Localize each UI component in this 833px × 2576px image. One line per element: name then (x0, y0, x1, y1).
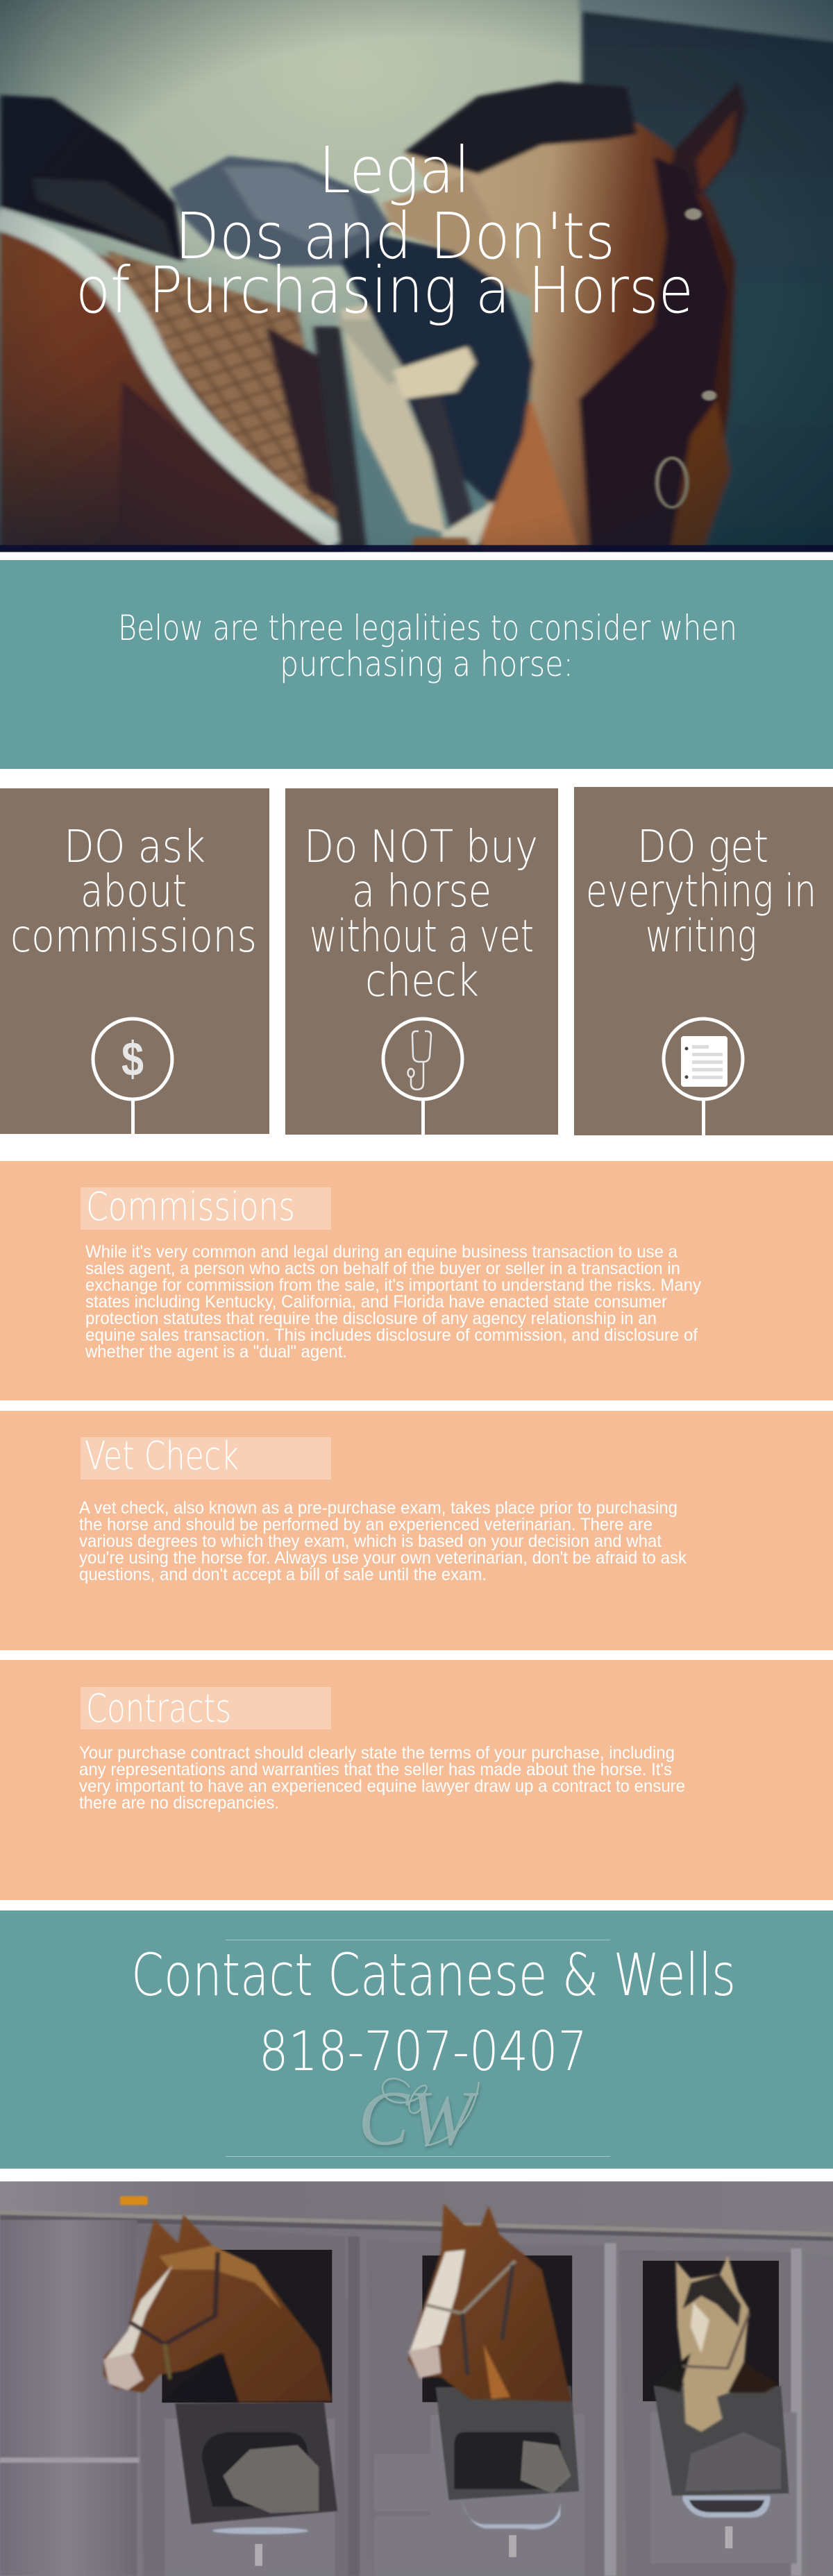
heading: commissions: Commissions (86, 1185, 295, 1230)
icon: dollar: $ (121, 1032, 144, 1086)
icon: document (664, 1019, 743, 1135)
panel: do not buy without a vet check (285, 788, 558, 1135)
intro text (118, 608, 737, 684)
panel: contact (0, 1910, 833, 2169)
commissions text (85, 1242, 701, 1362)
icon: dollar (93, 1019, 172, 1134)
card heading: DO ask (64, 822, 205, 873)
contracts text: very important to have an experienced equine lawyer draw up a contract to ensure (79, 1777, 685, 1796)
panel: DO get everything in writing (574, 787, 833, 1135)
hero title: Legal (319, 133, 470, 207)
vet check text: you're using the horse for. Always use your own veterinarian, don't be afraid to ask (79, 1548, 687, 1568)
hero photo: saddled horse (0, 0, 833, 569)
intro text: purchasing a horse: (280, 644, 573, 684)
vet check text: various degrees to which they exam, which is based on your decision and what (79, 1532, 662, 1551)
hero title (76, 133, 693, 328)
card heading: about (81, 866, 187, 917)
card heading (304, 822, 538, 1007)
trailer body (0, 2196, 833, 2576)
contracts text: there are no discrepancies. (79, 1793, 279, 1813)
commissions text: states including Kentucky, California, and Florida have enacted state consumer (85, 1292, 667, 1312)
card heading: without a vet (310, 911, 534, 963)
vet check text: A vet check, also known as a pre-purchase exam, takes place prior to purchasing (79, 1498, 678, 1518)
contracts text (79, 1743, 685, 1813)
card heading: check (365, 956, 479, 1007)
bottom photo: horses in trailer (0, 2181, 833, 2576)
horse: middle (408, 2204, 571, 2401)
panel: intro (0, 560, 833, 769)
vet check text: questions, and don't accept a bill of sale until the exam. (79, 1565, 487, 1584)
heading: vet check: Vet Check (85, 1434, 239, 1479)
hero title: Dos and Don'ts (175, 199, 615, 273)
vet check text: the horse and should be performed by an experienced veterinarian. There are (79, 1515, 653, 1534)
commissions text: protection statutes that require the disclosure of any agency relationship in an (85, 1309, 657, 1328)
icon: stethoscope (383, 1019, 462, 1135)
commissions text: sales agent, a person who acts on behalf of the buyer or seller in a transaction in (85, 1259, 680, 1278)
commissions text: whether the agent is a "dual" agent. (85, 1342, 347, 1362)
card heading: a horse (352, 866, 491, 917)
card heading (10, 822, 257, 963)
commissions text: equine sales transaction. This includes disclosure of commission, and disclosure of (85, 1325, 698, 1345)
heading: contracts: Contracts (86, 1686, 231, 1731)
card heading: commissions (10, 911, 257, 963)
panel: contracts (0, 1660, 833, 1900)
panel: vet check (0, 1411, 833, 1650)
horse: right (653, 2255, 778, 2432)
card heading: writing (646, 911, 757, 963)
hero title: of Purchasing a Horse (76, 253, 693, 328)
phone number: 818-707-0407 (259, 2021, 587, 2083)
logo: CW monogram: CW (358, 2076, 479, 2162)
panel: commissions (0, 1161, 833, 1400)
card heading (586, 822, 816, 963)
horse: left (103, 2214, 332, 2402)
contracts text: any representations and warranties that the seller has made about the horse. It's (79, 1760, 672, 1779)
panel: DO ask about commissions (0, 788, 269, 1134)
windows (162, 2250, 779, 2403)
commissions text: While it's very common and legal during an equine business transaction to use a (85, 1242, 678, 1262)
contracts text: Your purchase contract should clearly state the terms of your purchase, including (79, 1743, 675, 1763)
window vents (176, 2386, 789, 2534)
card heading: Do NOT buy (304, 822, 538, 873)
commissions text: exchange for commission from the sale, it's important to understand the risks. Many (85, 1276, 701, 1295)
card heading: DO get (637, 822, 768, 873)
vet check text (79, 1498, 687, 1584)
